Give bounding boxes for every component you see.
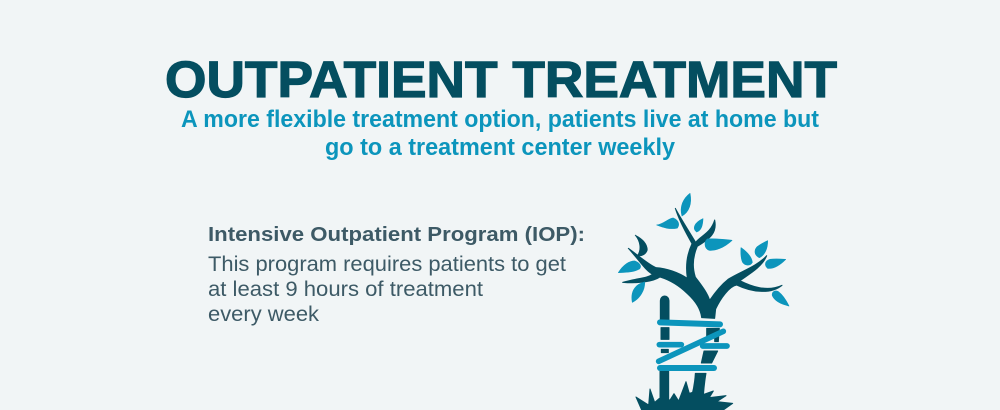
title: OUTPATIENT TREATMENT — [165, 51, 837, 108]
program description — [208, 253, 566, 326]
splint post — [660, 296, 669, 410]
tree trunk and branches — [623, 208, 782, 410]
leaves — [618, 193, 789, 306]
program description: every week — [208, 303, 320, 326]
program description: at least 9 hours of treatment — [208, 278, 483, 301]
subtitle — [181, 106, 819, 161]
subtitle: A more flexible treatment option, patients live at home but — [181, 106, 819, 133]
icon: bandaged tree with splint — [618, 193, 789, 410]
bandage wraps — [659, 322, 727, 368]
text block: Intensive Outpatient Program — [208, 223, 585, 326]
subtitle: go to a treatment center weekly — [325, 134, 676, 161]
grass — [636, 382, 733, 410]
dark leaf — [635, 235, 647, 256]
program heading: Intensive Outpatient Program (IOP): — [208, 223, 585, 246]
lower trunk — [687, 328, 719, 410]
program description: This program requires patients to get — [208, 253, 566, 276]
